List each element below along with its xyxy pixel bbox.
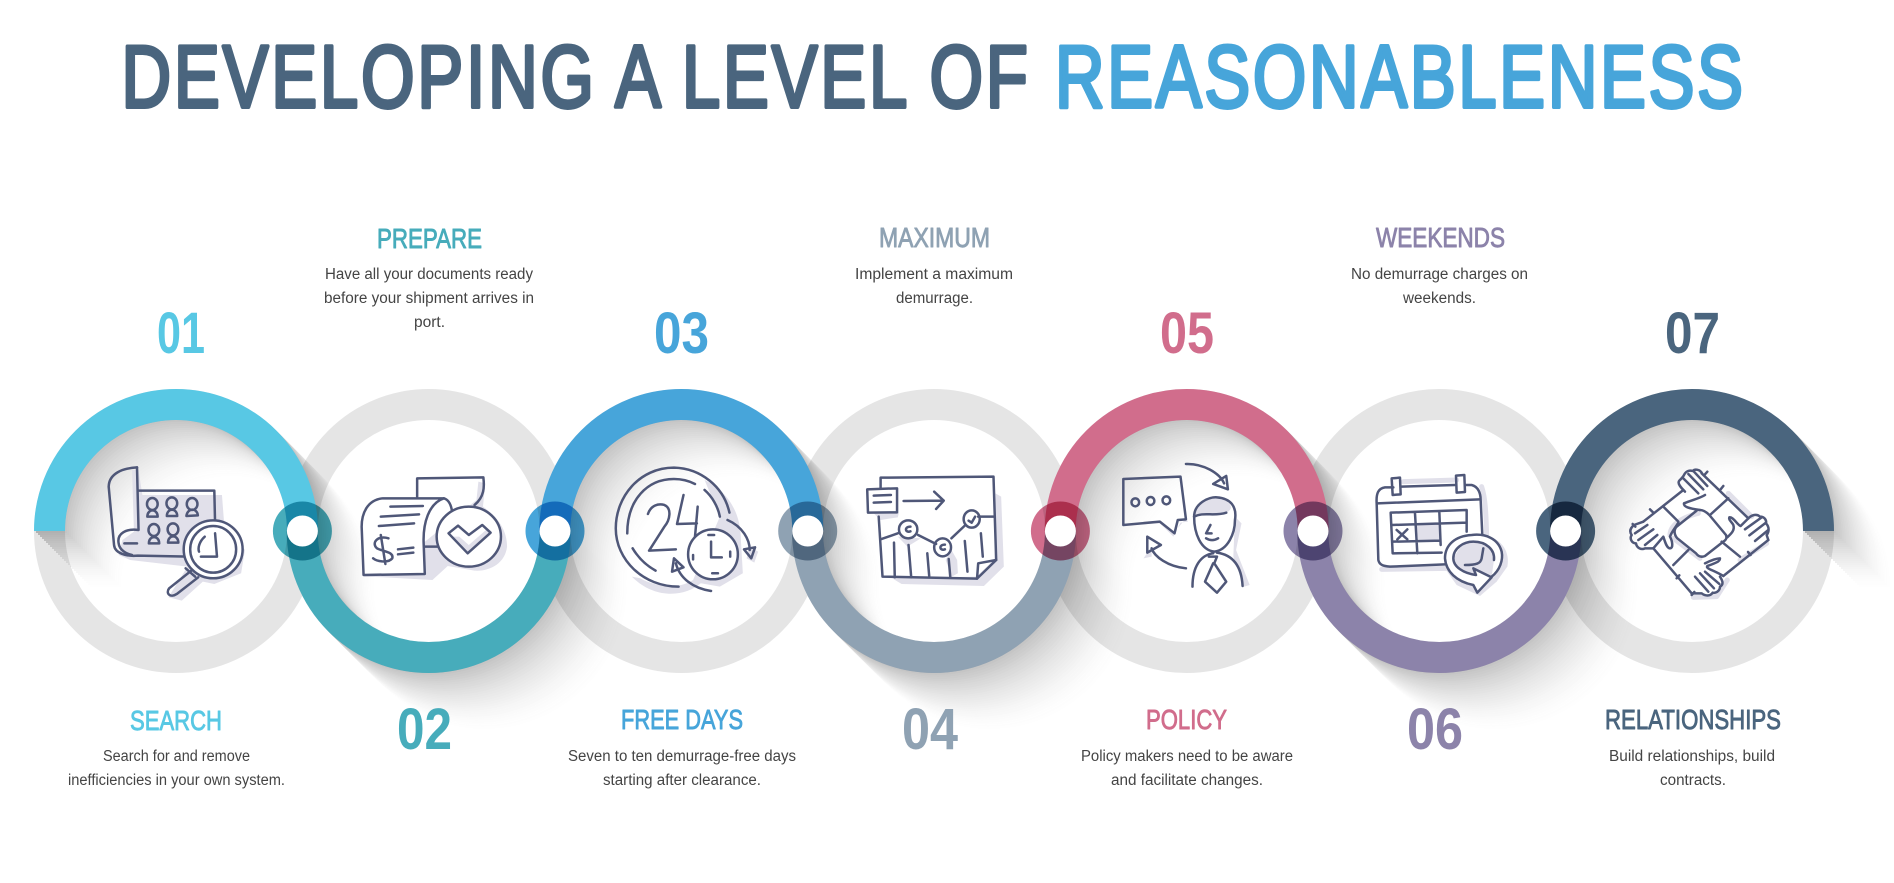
text block: policy: and facilitate changes. (1111, 772, 1263, 789)
step 01 number: 01 (157, 301, 205, 366)
text block: prepare: port. (414, 314, 445, 331)
text block: search: Search for and remove (103, 748, 250, 765)
title: DEVELOPING A LEVEL OF (122, 28, 1028, 126)
text block: relationships: contracts. (1660, 772, 1726, 789)
step 05 number: 05 (1160, 301, 1214, 366)
long diagonal shadows cast by coloured arcs (36, 420, 1874, 713)
arc 2 teal (302, 531, 555, 658)
icon: calendar with repeat arrow (1377, 475, 1508, 596)
text block: free days (568, 704, 796, 789)
step 06 number: 06 (1407, 697, 1463, 762)
text block: relationships (1605, 704, 1781, 789)
arc 6 purple (1313, 531, 1566, 658)
text block: prepare: PREPARE (377, 223, 482, 254)
step 07 number: 07 (1665, 301, 1720, 366)
arc 3 blue (555, 404, 808, 531)
connector 6-7 (1536, 502, 1595, 560)
text block: relationships: Build relationships, build (1609, 748, 1775, 765)
text block: weekends: No demurrage charges on (1351, 266, 1528, 283)
icon: receipt with checkmark (362, 477, 507, 580)
title (122, 28, 1743, 126)
text block: free days: starting after clearance. (603, 772, 761, 789)
icon: scroll and magnifier (109, 467, 245, 601)
connector 2-3 (526, 502, 584, 560)
icon: 24 hour clock (616, 468, 758, 594)
text block: policy: POLICY (1146, 704, 1227, 735)
text block: policy (1081, 704, 1293, 789)
connector 3-4 (778, 502, 837, 560)
text block: search (68, 705, 285, 789)
text block: free days: Seven to ten demurrage-free days (568, 748, 796, 765)
step 03 number: 03 (654, 301, 709, 366)
text block: prepare: before your shipment arrives in (324, 290, 534, 307)
text block: search: inefficiencies in your own system. (68, 772, 285, 789)
grey base rings (50, 404, 1818, 658)
arc 5 pink (1060, 404, 1313, 531)
step 04 number: 04 (902, 697, 958, 762)
arc 1 cyan (50, 404, 302, 531)
icon: chart on folded page (867, 477, 1004, 586)
text block: free days: FREE DAYS (621, 704, 743, 735)
title: REASONABLENESS (1055, 28, 1743, 126)
text block: maximum: Implement a maximum (855, 266, 1013, 283)
text block: prepare (324, 223, 534, 331)
step 02 number: 02 (397, 697, 452, 762)
icon: four joined hands (1630, 470, 1769, 597)
arc 4 slate (808, 531, 1060, 658)
connector 1-2 (273, 502, 332, 560)
text block: search: SEARCH (130, 705, 222, 736)
icon: person with speech bubble (1123, 464, 1250, 593)
connector 4-5 (1031, 502, 1090, 560)
text block: weekends: weekends. (1402, 290, 1476, 307)
text block: policy: Policy makers need to be aware (1081, 748, 1293, 765)
text block: weekends (1351, 222, 1528, 307)
text block: maximum (855, 222, 1013, 307)
text block: relationships: RELATIONSHIPS (1605, 704, 1781, 735)
text block: maximum: MAXIMUM (879, 222, 990, 253)
text block: prepare: Have all your documents ready (325, 266, 533, 283)
arc 7 navy (1566, 404, 1818, 531)
connector 5-6 (1284, 502, 1342, 560)
text block: weekends: WEEKENDS (1376, 222, 1505, 253)
text block: maximum: demurrage. (896, 290, 973, 307)
